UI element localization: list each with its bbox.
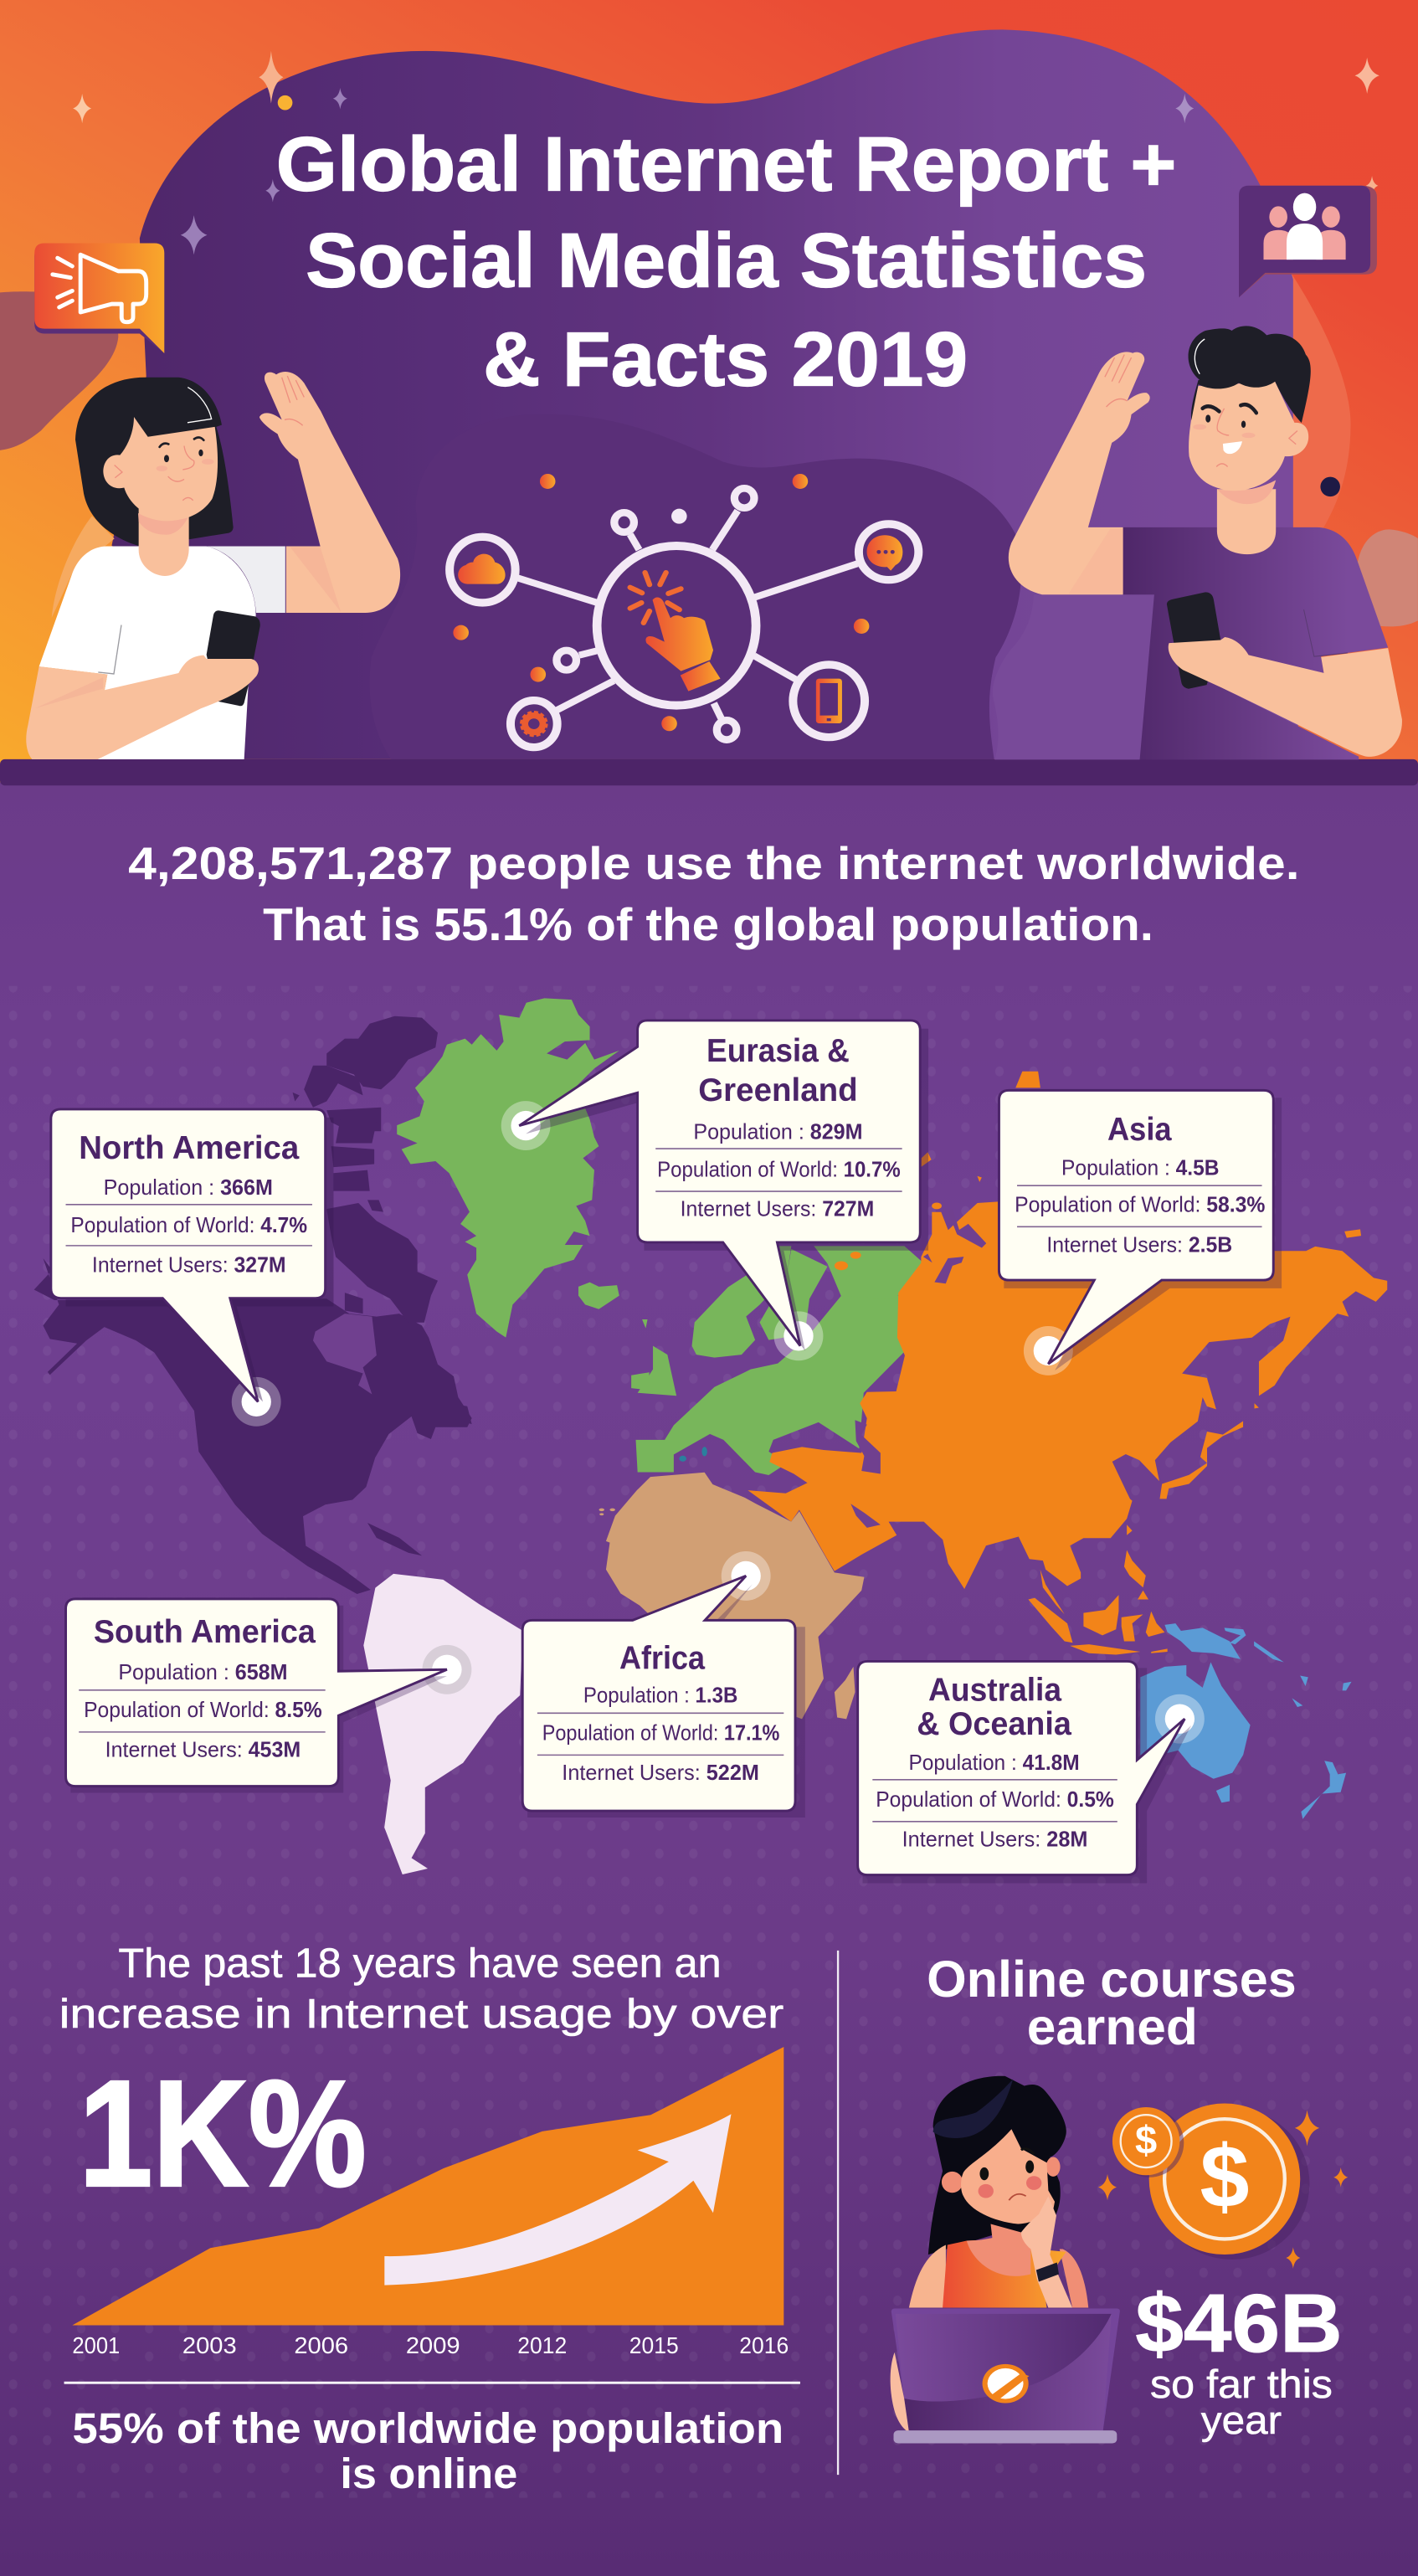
heading: usage increase: The past 18 years have seen an [118,1941,722,1986]
continent: Greenland and Iceland [397,998,619,1338]
callout: Australia and Oceania [858,1661,1191,1883]
woman with laptop [891,2076,1120,2443]
callout: Asia: Population of World: 58.3% [1015,1194,1265,1217]
arrow [384,2114,731,2285]
callout: Australia and Oceania: Australia [928,1672,1062,1709]
coins: $ [1200,2127,1249,2226]
callout: Eurasia and Greenland [519,1021,928,1350]
chart year labels: 2009 [406,2332,460,2358]
callout: South America [66,1599,447,1792]
Hudson Bay [313,1314,377,1394]
callout: Africa: Africa [619,1639,706,1676]
area chart [72,2047,783,2325]
continent: Australia and Oceania [1140,1623,1352,1819]
chart year labels: 2016 [739,2332,789,2358]
chart year labels: 2015 [629,2332,679,2358]
callout: Eurasia and Greenland: Eurasia & [706,1032,850,1069]
callout: South America: Internet Users: 453M [105,1738,301,1761]
orange dots [453,474,869,731]
callout: Africa: Population of World: 17.1% [542,1722,779,1746]
continent: South America [363,1574,522,1874]
header inner dark blob [370,414,1021,759]
continent: Africa [599,1473,864,1719]
continent: Asia [748,1190,1387,1655]
callout: South America: South America [94,1613,316,1650]
chart year labels [72,2332,789,2358]
stat: $46B: year [1201,2398,1282,2442]
Persian Gulf [850,1504,881,1528]
callout: Asia: Asia [1107,1111,1173,1148]
title: & Facts 2019 [483,315,968,402]
subtitle [128,837,1300,950]
header purple blob [111,29,1298,759]
continent: North America [34,1016,472,1594]
network diagram [450,474,918,748]
Asia northern coast and islands [835,1072,1361,1499]
callout: North America: North America [79,1129,300,1166]
callout: Eurasia and Greenland: Internet Users: 727M [681,1198,874,1221]
callout: North America: Internet Users: 327M [92,1253,286,1277]
chart year labels: 2001 [72,2332,120,2358]
header background [0,0,1418,789]
caption: population online [72,2404,783,2497]
callout: Asia [999,1090,1282,1370]
title: Global Internet Report + [276,121,1176,208]
Caspian Sea [855,1420,881,1474]
icon: gear [521,712,547,736]
heading: usage increase: increase in Internet usage by over [59,1992,783,2037]
big number: 1K% [79,2050,367,2219]
callout: Asia: Population : 4.5B [1061,1156,1219,1180]
callout: Australia and Oceania: Population : 41.8M [908,1751,1080,1775]
sparkles in header [73,51,1379,255]
coins [1098,2103,1348,2269]
callout: North America: Population of World: 4.7% [70,1214,307,1237]
callout: Eurasia and Greenland: Population of World: 10.7% [657,1158,901,1181]
callout: Africa: Population : 1.3B [583,1684,737,1708]
subtitle: 4,208,571,287 people use the internet worldwide. [128,837,1300,889]
callout: Africa: Internet Users: 522M [562,1761,759,1785]
icon: megaphone bubble [34,244,164,353]
title: Social Media Statistics [306,217,1147,304]
callout: South America: Population : 658M [118,1661,288,1684]
heading: online courses [927,1951,1297,2055]
chart year labels: 2003 [182,2332,237,2358]
callout: Africa [522,1576,805,1818]
callout: Asia: Internet Users: 2.5B [1046,1234,1232,1257]
woman figure [26,372,400,759]
caption: population online: 55% of the worldwide population [72,2404,783,2452]
callout: Eurasia and Greenland: Population : 829M [693,1120,863,1144]
callout: Australia and Oceania: Internet Users: 28M [902,1828,1087,1851]
dark dot [1320,477,1340,496]
stat: $46B: $46B [1135,2277,1343,2369]
chart year labels: 2012 [517,2332,567,2358]
stat: $46B: so far this [1150,2362,1333,2406]
callout: Australia and Oceania: Population of World: 0.5% [876,1788,1114,1812]
continent: Europe [631,1246,924,1475]
caption: population online: is online [340,2450,517,2497]
title [276,121,1176,402]
coins: $ [1135,2117,1157,2162]
icon: pointing hand [630,573,721,692]
heading: online courses: Online courses [927,1951,1297,2008]
callout: North America: Population : 366M [104,1176,273,1200]
stat: $46B [1135,2277,1343,2442]
icon: phone [816,679,842,723]
callout: Australia and Oceania: & Oceania [917,1705,1072,1742]
heading: online courses: earned [1027,1998,1198,2055]
header decorative blobs [0,271,1351,529]
callout: Eurasia and Greenland: Greenland [698,1072,858,1108]
callout: North America [51,1109,333,1401]
icon: cloud [458,554,506,584]
world map [34,998,1387,1874]
man figure [993,326,1418,759]
icon: chat [867,535,902,571]
chart year labels: 2006 [294,2332,348,2358]
subtitle: That is 55.1% of the global population. [263,898,1153,950]
laptop logo [983,2364,1029,2403]
header base bar [0,759,1418,785]
callout: South America: Population of World: 8.5% [84,1699,322,1722]
body background [0,782,1418,2576]
map pins [232,1101,1205,1744]
icon: group bubble [1239,186,1377,297]
heading: usage increase [59,1941,783,2037]
